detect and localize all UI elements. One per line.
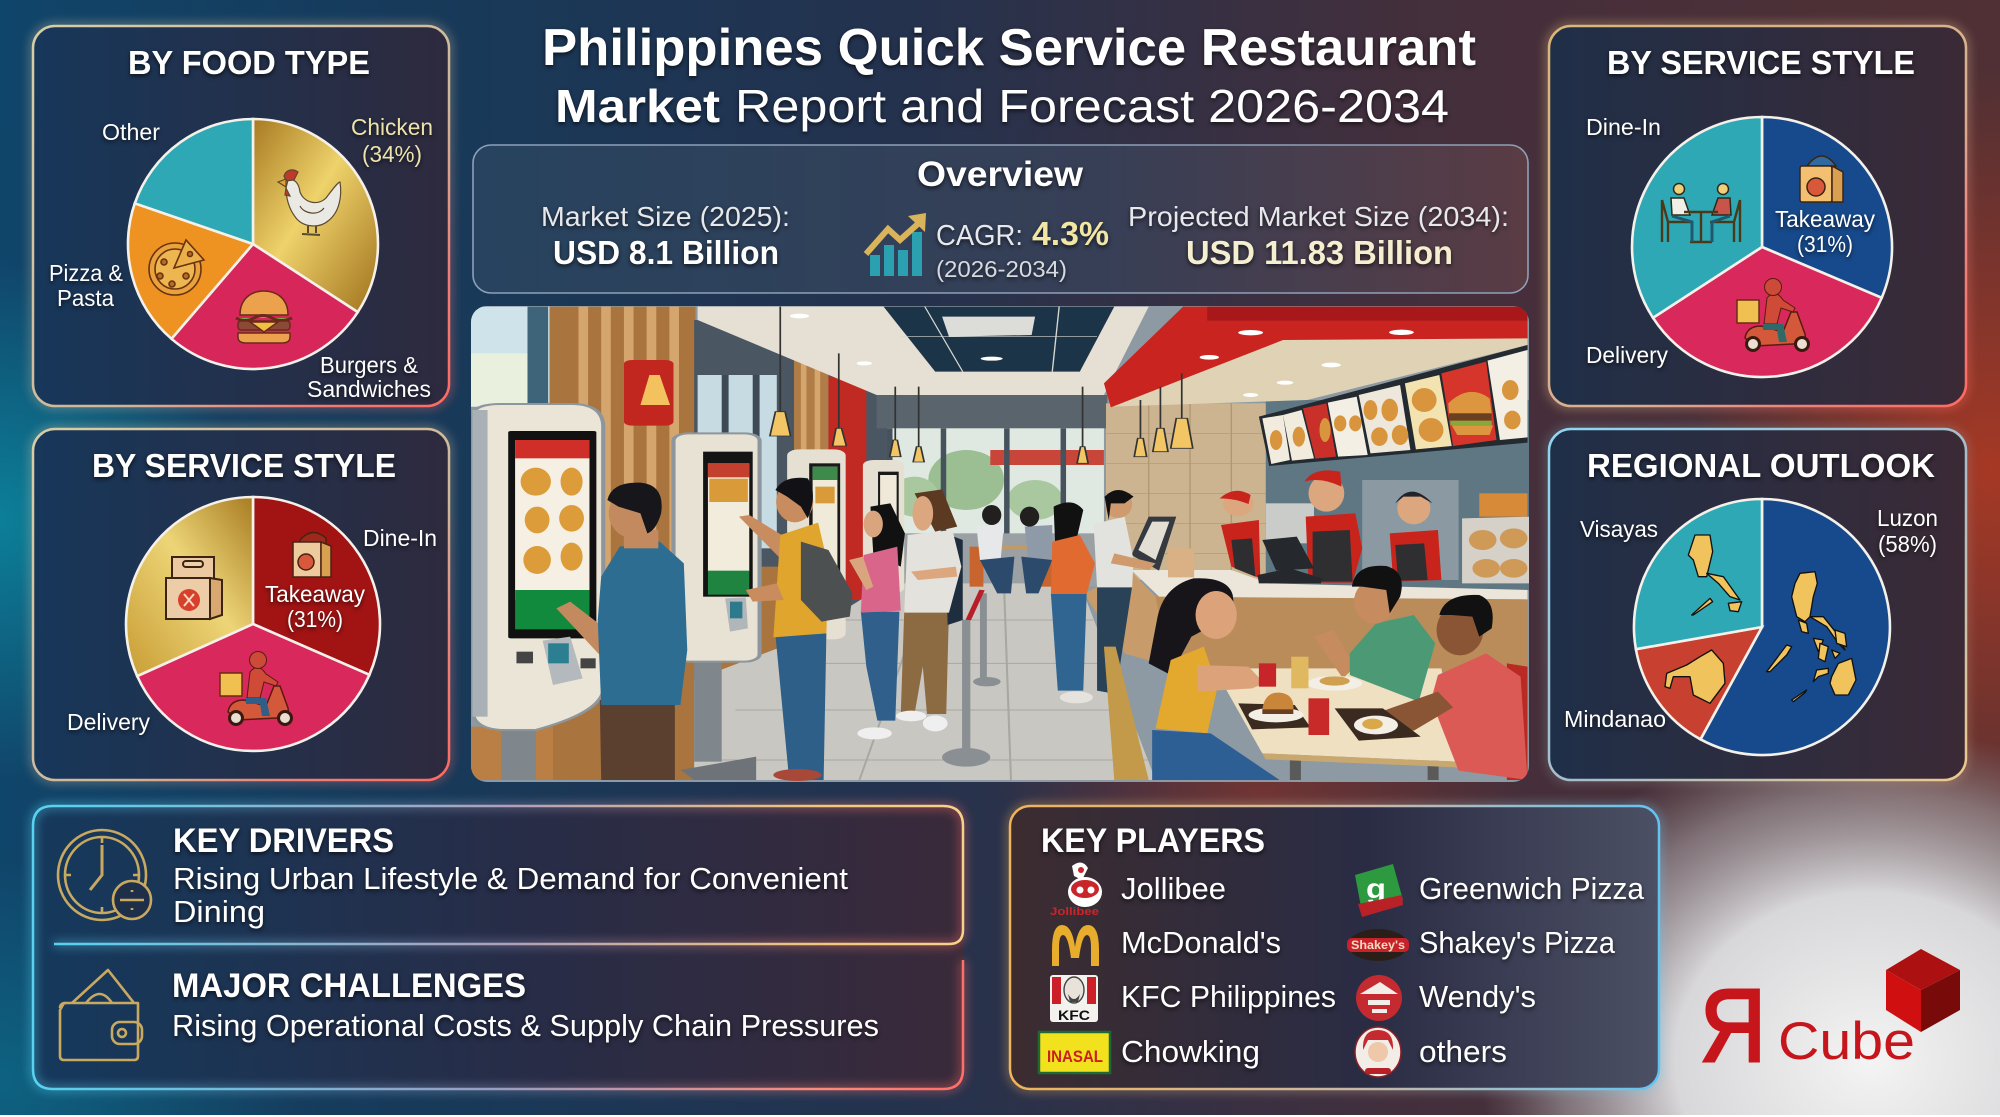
icon: diners at table xyxy=(1662,184,1740,242)
icon: delivery scooter xyxy=(220,652,292,724)
logo: jollibee: Jollibee xyxy=(1050,906,1099,918)
stat: market size 2025: USD 8.1 Billion xyxy=(553,234,779,271)
stat: projected market size xyxy=(1128,201,1509,271)
logo: pizza hut style badge xyxy=(1356,975,1402,1021)
logo: greenwich pizza: g xyxy=(1366,873,1386,904)
icon: chicken xyxy=(278,170,341,235)
heading: overview: Overview xyxy=(917,155,1084,194)
logo: greenwich pizza xyxy=(1355,864,1403,917)
panel: by service style (right) xyxy=(1549,26,1966,406)
customers at counter xyxy=(1051,490,1156,703)
labels: food type xyxy=(49,114,433,402)
labels: service style: Dine-In xyxy=(1586,114,1661,140)
kiosk 4 and 3 xyxy=(787,449,904,639)
title: Market xyxy=(555,80,720,132)
icon: delivery scooter xyxy=(1737,278,1808,350)
list: key player names: Chowking xyxy=(1121,1034,1260,1069)
labels: service style: Takeaway xyxy=(1775,206,1875,232)
labels: service style: Delivery xyxy=(1586,342,1668,368)
title: Report and Forecast 2026-2034 xyxy=(735,80,1449,132)
key drivers text: Dining xyxy=(173,894,265,929)
icon: takeaway bag xyxy=(293,532,331,577)
logo: kfc xyxy=(1050,975,1098,1023)
major challenges text: Rising Operational Costs & Supply Chain Pressures xyxy=(172,1008,879,1043)
illustration: restaurant interior with kiosks xyxy=(460,300,1540,790)
logo wordmark: Я xyxy=(1700,968,1766,1083)
stat: projected market size: USD 11.83 Billion xyxy=(1186,234,1453,271)
heading: key players: KEY PLAYERS xyxy=(1041,822,1265,860)
list: key player names: Shakey's Pizza xyxy=(1419,925,1616,960)
labels: service style: (31%) xyxy=(287,606,343,632)
tile wall, kitchen and soffit xyxy=(1104,307,1540,590)
labels: regions: (58%) xyxy=(1878,531,1937,557)
stat: market size 2025: Market Size (2025): xyxy=(541,201,790,232)
labels: regions: Mindanao xyxy=(1564,706,1666,732)
labels: regions: Luzon xyxy=(1877,505,1938,531)
list: key player names: KFC Philippines xyxy=(1121,979,1336,1014)
labels: service style xyxy=(1586,114,1875,368)
queue barrier xyxy=(942,590,1001,767)
logo: kfc: KFC xyxy=(1058,1007,1090,1023)
stat: cagr: 4.3% xyxy=(1032,215,1109,252)
stat: projected market size: Projected Market Size (2034): xyxy=(1128,201,1509,232)
labels: food type: Pasta xyxy=(57,285,114,311)
pie chart: regions xyxy=(1634,499,1890,755)
foreground diners table xyxy=(1104,566,1527,780)
stat: cagr: (2026-2034) xyxy=(936,256,1067,282)
person in white shirt xyxy=(896,489,963,731)
labels: service style: Delivery xyxy=(67,709,150,735)
labels: food type: Pizza & xyxy=(49,260,123,286)
logo: chowking: INASAL xyxy=(1047,1047,1103,1066)
logo: rcube xyxy=(1700,949,1960,1083)
kiosk 2 xyxy=(673,433,760,780)
red wall lamp xyxy=(624,360,673,426)
icon: growth chart xyxy=(866,213,926,276)
labels: service style: (31%) xyxy=(1797,231,1853,257)
labels: regions xyxy=(1564,505,1938,732)
heading: regional outlook: REGIONAL OUTLOOK xyxy=(1587,447,1935,484)
logo wordmark: Cube xyxy=(1778,1012,1915,1071)
labels: food type: Other xyxy=(102,119,160,145)
key drivers text xyxy=(173,822,848,929)
staff xyxy=(1131,470,1441,583)
labels: food type: (34%) xyxy=(362,141,422,167)
logo cube xyxy=(1886,949,1960,1032)
icon: burger xyxy=(236,291,292,343)
list: key player names: Wendy's xyxy=(1419,979,1536,1014)
labels: food type: Burgers & xyxy=(320,352,418,378)
pie chart: service style xyxy=(126,497,380,751)
back windows and floor xyxy=(694,395,1156,780)
logo: jollibee xyxy=(1050,862,1102,918)
icon: paper bag xyxy=(166,557,222,619)
logo: shakeys pizza: Shakey's xyxy=(1351,938,1405,952)
panel: by food type xyxy=(33,26,449,406)
stat: cagr xyxy=(936,215,1109,282)
icon: wallet xyxy=(60,970,142,1060)
person at kiosk 1 xyxy=(556,483,687,780)
back diners xyxy=(970,505,1052,593)
major challenges text xyxy=(172,967,879,1043)
labels: service style: Takeaway xyxy=(265,581,365,607)
major challenges text: MAJOR CHALLENGES xyxy=(172,967,526,1005)
panel: overview xyxy=(473,145,1528,293)
icon: takeaway bag xyxy=(1800,156,1843,202)
list: key player names: others xyxy=(1419,1034,1507,1069)
list: key player names: Jollibee xyxy=(1121,871,1226,906)
logo: chowking xyxy=(1039,1032,1110,1073)
title: Philippines Quick Service Restaurant xyxy=(542,19,1476,77)
panel: regional outlook xyxy=(1549,429,1966,780)
labels: service style xyxy=(67,525,437,735)
pendant lamps xyxy=(770,307,1193,463)
person in pink shirt xyxy=(849,503,905,739)
logo: shakeys pizza xyxy=(1347,929,1409,961)
title xyxy=(542,19,1476,132)
side wall and windows xyxy=(694,320,887,687)
man in green xyxy=(1314,566,1435,702)
icon: clock and coin xyxy=(58,830,151,920)
pie chart: service style xyxy=(1632,117,1892,377)
man in red xyxy=(1376,595,1527,780)
left window and wood wall xyxy=(470,307,696,780)
panel: by service style (left) xyxy=(33,429,449,780)
list: key player names xyxy=(1121,871,1645,1069)
heading: by service style: BY SERVICE STYLE xyxy=(1607,44,1915,81)
logo wordmark xyxy=(1700,968,1915,1083)
heading: by food type: BY FOOD TYPE xyxy=(128,44,370,81)
pie chart: food type xyxy=(128,119,378,369)
woman in yellow xyxy=(1149,578,1280,780)
icon: pizza xyxy=(149,240,204,295)
heading: by service style: BY SERVICE STYLE xyxy=(92,447,396,484)
labels: food type: Sandwiches xyxy=(307,376,431,402)
person with yellow shirt and backpack xyxy=(739,478,853,781)
list: key player names: McDonald's xyxy=(1121,925,1281,960)
list: key player names: Greenwich Pizza xyxy=(1419,871,1645,906)
labels: food type: Chicken xyxy=(351,114,433,140)
stat: cagr: CAGR: xyxy=(936,220,1023,252)
menu boards xyxy=(1259,345,1527,466)
stat: market size 2025 xyxy=(541,201,790,271)
labels: regions: Visayas xyxy=(1580,516,1658,542)
labels: service style: Dine-In xyxy=(363,525,437,551)
logo: wendys xyxy=(1355,1027,1401,1077)
panel: key drivers and major challenges xyxy=(33,806,963,1089)
key drivers text: KEY DRIVERS xyxy=(173,822,394,860)
kiosk 1 xyxy=(472,404,603,780)
logo: mcdonalds xyxy=(1052,925,1099,966)
panel: key players xyxy=(1010,806,1659,1089)
icon: philippines maps xyxy=(1665,535,1856,703)
ceiling xyxy=(698,307,1149,395)
counter xyxy=(1083,517,1531,673)
trays, food and drinks xyxy=(1238,657,1421,741)
key drivers text: Rising Urban Lifestyle & Demand for Convenient xyxy=(173,861,848,896)
